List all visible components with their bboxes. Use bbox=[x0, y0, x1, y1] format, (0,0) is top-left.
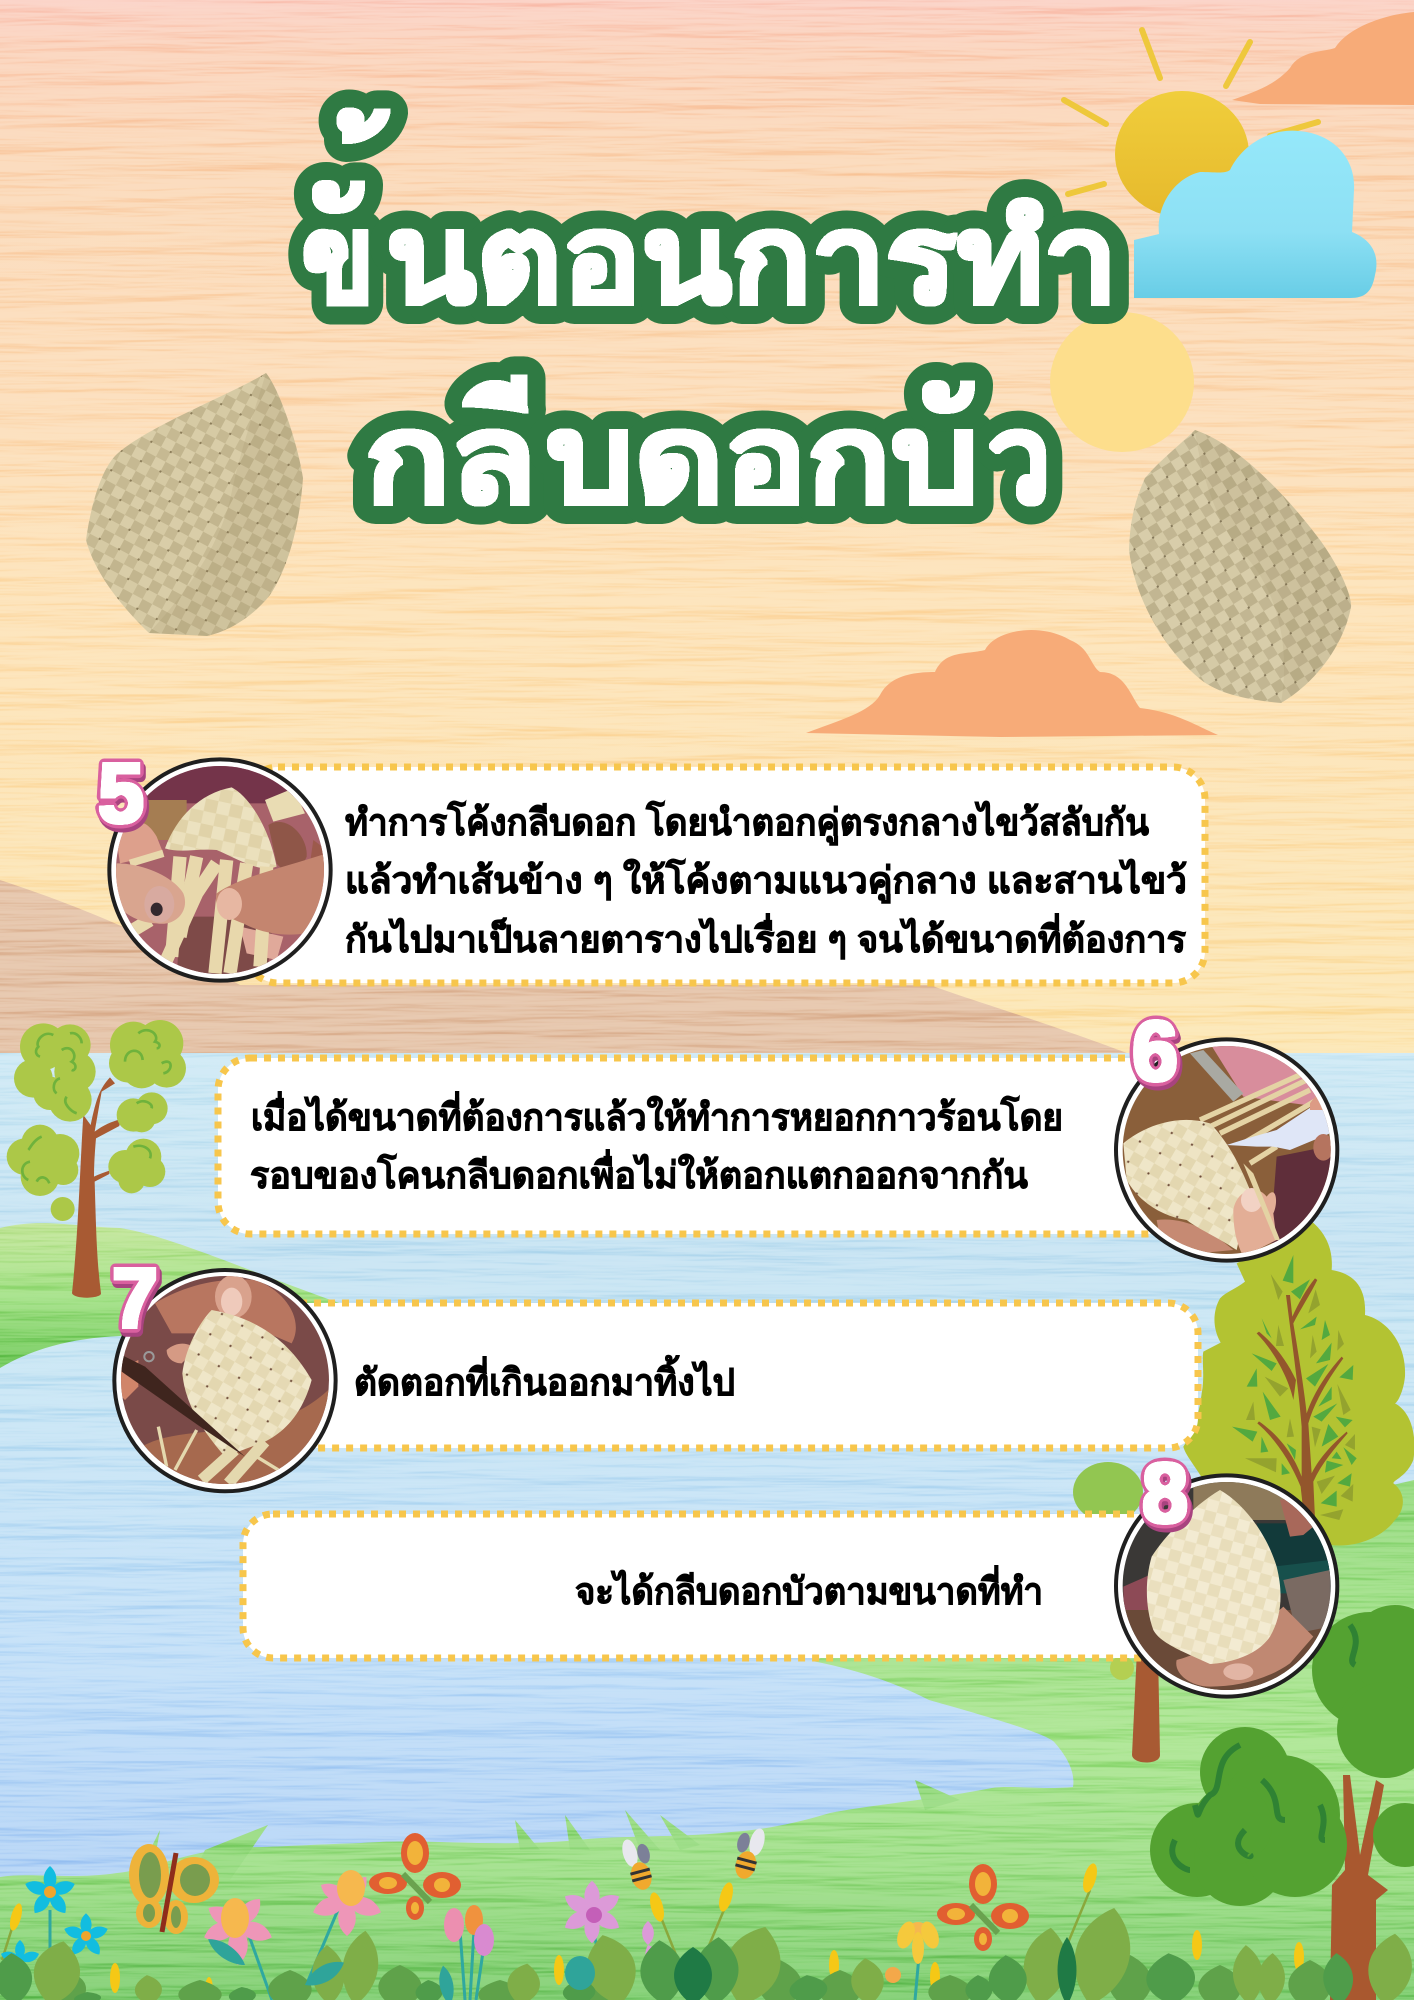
title line 2: ว bbox=[988, 391, 1051, 529]
tree: small tree behind card 8 bbox=[1073, 1462, 1160, 1762]
photo: step 7 cutting with scissors bbox=[112, 1268, 338, 1494]
leaves: teal accents bbox=[204, 1934, 595, 2000]
bee: left bbox=[620, 1835, 658, 1893]
leaves: light green group bbox=[27, 1901, 1414, 2000]
card: step 6 bbox=[218, 1058, 1178, 1234]
step 5 text: ทำการโค้งกลีบดอก โดยนำตอกคู่ตรงกลางไขว้สลับกัน bbox=[345, 800, 1149, 846]
icon: orange cloud center bbox=[806, 630, 1218, 737]
butterfly: yellow bbox=[129, 1844, 219, 1934]
yellow buds bbox=[8, 1862, 1304, 2000]
step 5 text bbox=[345, 800, 1187, 960]
flower: yellow small bbox=[885, 1919, 942, 1983]
flowers: tulips bbox=[444, 1905, 494, 1956]
bee: right bbox=[729, 1824, 767, 1882]
flowers: purple bbox=[561, 1881, 664, 1974]
background: shore grass tufts bbox=[135, 1780, 960, 1885]
tree: right lime tree bbox=[1183, 1220, 1414, 1546]
background: water bbox=[0, 1053, 1414, 2000]
background: lower right land bbox=[0, 1480, 1414, 2000]
leaves: back row bbox=[46, 1955, 1332, 2000]
title line 2: กล bbox=[365, 391, 537, 529]
butterfly: orange left bbox=[369, 1833, 461, 1920]
badge: number 7: 7 bbox=[112, 1251, 158, 1345]
icon: yellow sun bbox=[1115, 91, 1249, 217]
card: step 8 bbox=[243, 1514, 1173, 1658]
flowers: pink bbox=[201, 1872, 384, 1965]
icon: blue cloud bbox=[1134, 131, 1376, 298]
badge: number 8: 8 bbox=[1142, 1446, 1188, 1540]
title line 1: นตอนการทำ bbox=[386, 191, 1118, 329]
leaves: dark green bbox=[674, 1937, 1076, 2000]
icon: sun rays bbox=[1064, 30, 1318, 194]
tree: left tree bbox=[7, 1020, 186, 1298]
photo: step 8 finished petal bbox=[1114, 1473, 1340, 1699]
flower stems bbox=[50, 1905, 920, 2000]
title line 2: บดอกบ bbox=[546, 391, 979, 529]
card: step 5 bbox=[246, 767, 1205, 983]
icon: pale yellow sun bbox=[1050, 312, 1194, 452]
step 6 text: รอบของโคนกลีบดอกเพื่อไม่ให้ตอกแตกออกจากกัน bbox=[250, 1149, 1028, 1196]
title line 1: ้ bbox=[338, 109, 389, 142]
badge: number 5: 5 bbox=[98, 746, 144, 840]
bottom flora bbox=[0, 1824, 1414, 2000]
title line 1: ข bbox=[302, 191, 374, 329]
title line 2: ี bbox=[463, 376, 527, 412]
badge: number 6: 6 bbox=[1132, 1004, 1178, 1098]
step 6 text: เมื่อได้ขนาดที่ต้องการแล้วให้ทำการหยอกกาวร้อนโดย bbox=[251, 1091, 1063, 1138]
background: sky bbox=[0, 0, 1414, 1060]
step 7 text: ตัดตอกที่เกินออกมาทิ้งไป bbox=[354, 1355, 735, 1403]
icon: woven basket left bbox=[86, 373, 303, 636]
leaves: mid green group bbox=[0, 1936, 1355, 2000]
step 6 text bbox=[250, 1091, 1063, 1196]
title line 1: ั bbox=[313, 182, 364, 212]
step 5 text: กันไปมาเป็นลายตารางไปเรื่อย ๆ จนได้ขนาดที่ต้องการ bbox=[345, 913, 1186, 960]
icon: orange cloud top right bbox=[1232, 12, 1414, 105]
flowers: blue bbox=[0, 1866, 109, 1965]
photo: step 6 applying glue bbox=[1114, 1037, 1340, 1263]
photo: step 5 hands weaving bbox=[107, 757, 333, 983]
icon: woven basket right bbox=[1129, 430, 1351, 703]
background: left hill bbox=[0, 1223, 345, 1368]
title line 2: ั bbox=[923, 382, 974, 412]
step 5 text: แล้วทำเส้นข้าง ๆ ให้โค้งตามแนวคู่กลาง และสานไขว้ bbox=[345, 858, 1187, 904]
step 8 text: จะได้กลีบดอกบัวตามขนาดที่ทำ bbox=[575, 1565, 1043, 1612]
butterfly: orange right bbox=[937, 1864, 1029, 1951]
title bbox=[302, 109, 1118, 529]
tree: large green tree bottom right bbox=[1150, 1605, 1414, 2000]
background: distant mountain bbox=[0, 880, 1140, 1058]
card: step 7 bbox=[270, 1303, 1198, 1448]
